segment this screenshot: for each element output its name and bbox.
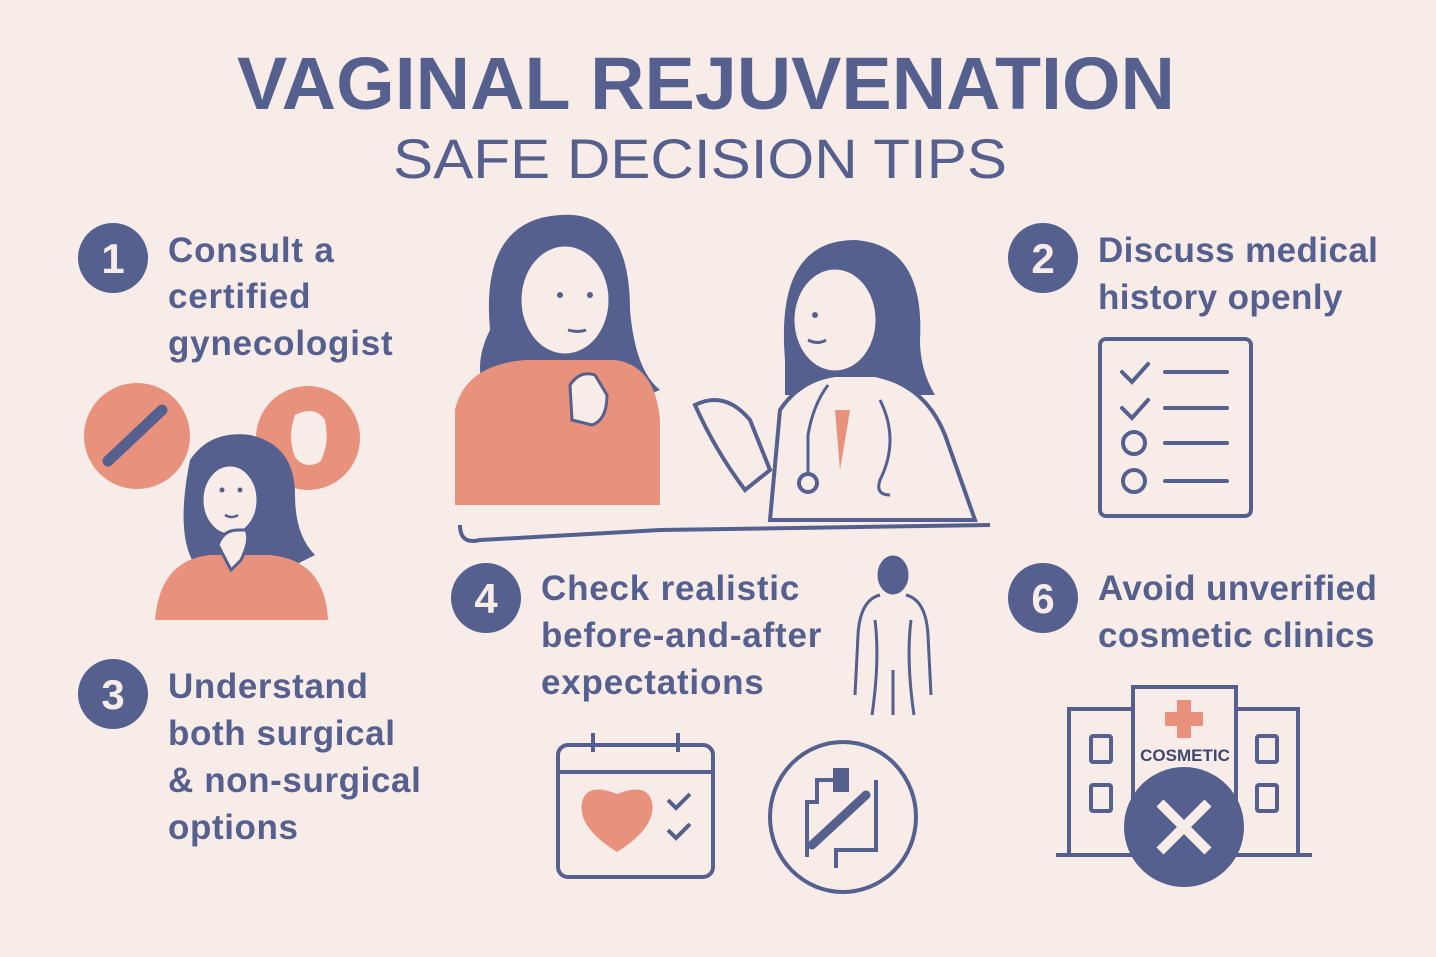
step 3: Understand <box>168 667 368 706</box>
step 1: Consult a <box>168 231 335 270</box>
step 1: certified <box>168 277 311 316</box>
step 2 <box>1008 223 1378 317</box>
title: VAGINAL REJUVENATION <box>237 42 1175 125</box>
step 2: Discuss medical <box>1098 231 1378 270</box>
step 2: 2 <box>1031 235 1055 282</box>
step 1 <box>78 223 393 363</box>
step 3: & non-surgical <box>168 761 421 800</box>
title <box>237 42 1175 190</box>
step 6: 6 <box>1031 575 1055 622</box>
title: SAFE DECISION TIPS <box>393 127 1007 190</box>
step 4: before-and-after <box>541 616 822 655</box>
step 4: Check realistic <box>541 569 800 608</box>
step 4: 4 <box>474 575 498 622</box>
icon: checklist <box>1100 339 1251 516</box>
icon: no product <box>770 742 916 892</box>
step 3: options <box>168 808 299 847</box>
step 2: history openly <box>1098 278 1343 317</box>
step 3: both surgical <box>168 714 396 753</box>
icon: body silhouette <box>855 557 931 715</box>
step 6: cosmetic clinics <box>1098 616 1375 655</box>
illustration: thinking woman with options <box>84 383 360 620</box>
step 4 <box>451 563 822 702</box>
step 3: 3 <box>101 671 125 718</box>
step 6: Avoid unverified <box>1098 569 1377 608</box>
icon: cosmetic clinic crossed: COSMETIC <box>1140 746 1230 765</box>
icon: cosmetic clinic crossed <box>1056 687 1312 887</box>
step 1: gynecologist <box>168 324 393 363</box>
step 6 <box>1008 563 1377 655</box>
step 4: expectations <box>541 663 765 702</box>
center illustration: patient and doctor <box>455 215 990 541</box>
step 1: 1 <box>101 235 125 282</box>
icon: calendar heart <box>558 733 713 877</box>
step 3 <box>78 659 421 847</box>
